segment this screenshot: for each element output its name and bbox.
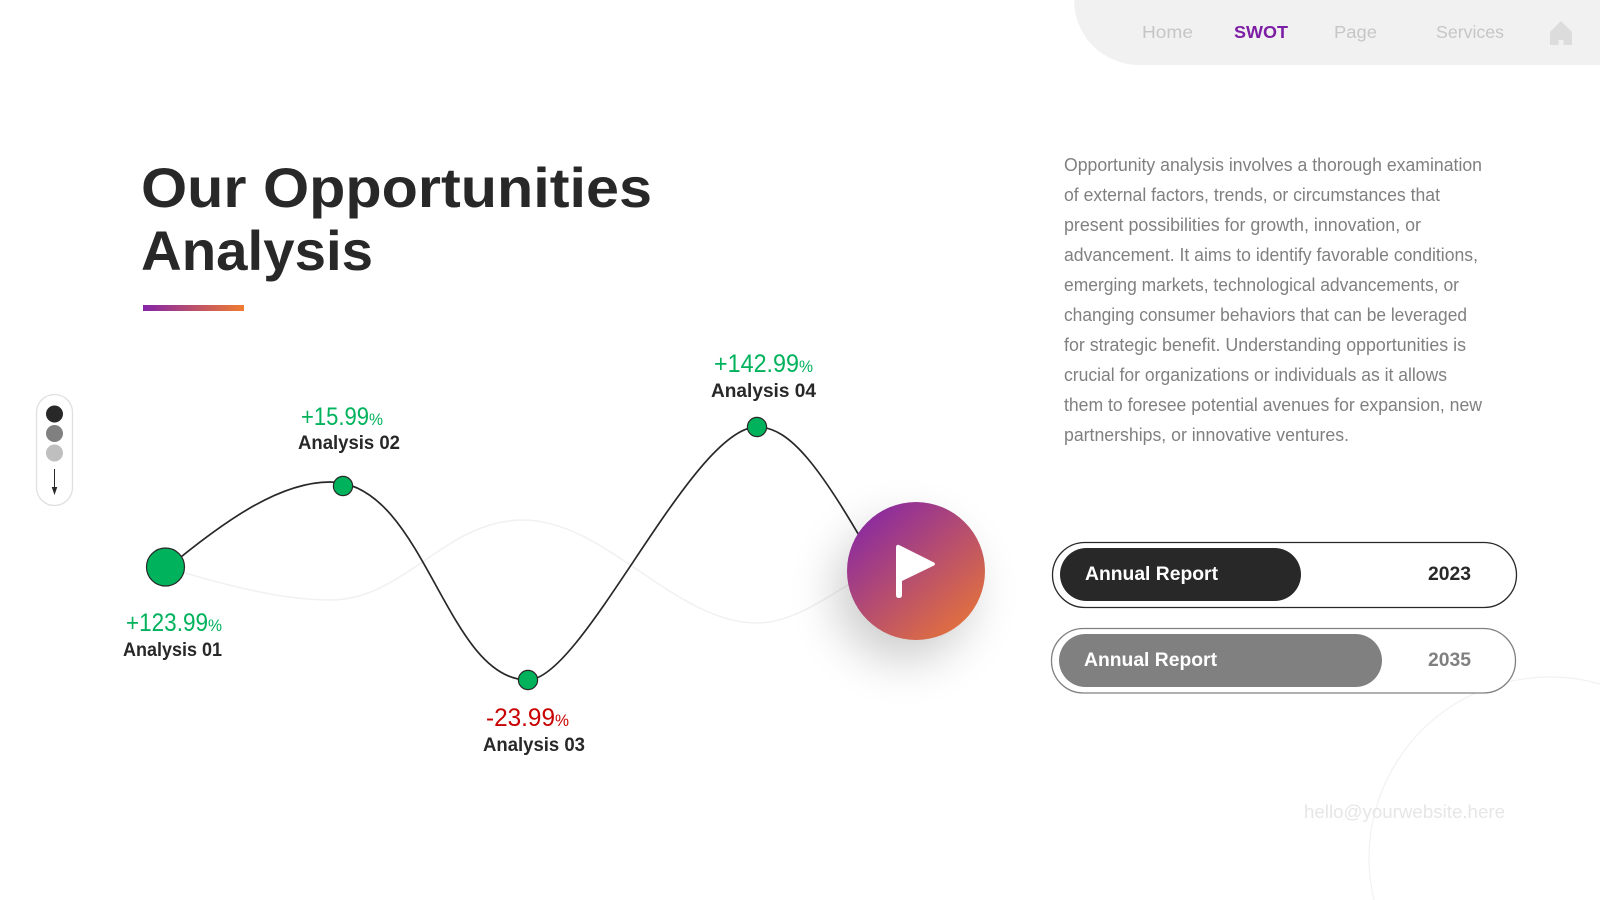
badge gradient disc [847,502,985,640]
title: Our Opportunities [141,156,652,219]
label: Analysis 03 [483,704,585,756]
report pill 2035 [1052,628,1516,693]
badge shadow [836,524,972,660]
footer email: hello@yourwebsite.here [1304,802,1505,822]
navigation bar [1074,0,1600,65]
icon: home [1550,21,1572,45]
flag badge [836,502,985,660]
title [141,156,652,282]
label: Analysis 04: % [799,357,813,376]
pager dot dark [46,406,63,422]
decorative circle outline [1369,677,1600,900]
label: Analysis 01 [123,609,222,661]
description text: for strategic benefit. Understanding opportunities is [1064,335,1466,355]
label: Analysis 04: Analysis 04 [711,381,816,402]
title gradient underline [143,305,244,311]
pill outline [1052,542,1516,608]
data point: Analysis 03 [518,670,538,690]
description text: them to foresee potential avenues for expansion, new [1064,395,1483,415]
label: Analysis 02 [298,403,400,454]
label: Analysis 02: +15.99 [301,403,369,431]
label: Analysis 03: Analysis 03 [483,735,585,756]
label: Analysis 02: Analysis 02 [298,433,400,454]
description text: crucial for organizations or individuals as it allows [1064,365,1447,385]
description text: partnerships, or innovative ventures. [1064,425,1349,445]
pill year: 2035 [1428,650,1471,671]
nav item: Home: Home [1142,22,1193,42]
description text: changing consumer behaviors that can be leveraged [1064,305,1467,325]
description text: of external factors, trends, or circumstances that [1064,185,1440,205]
pager outline [36,394,72,506]
label: Analysis 04: +142.99 [714,350,799,378]
nav item: SWOT active: SWOT [1234,22,1288,42]
description text: Opportunity analysis involves a thorough examination [1064,155,1482,175]
nav item: Services: Services [1436,22,1504,42]
nav item: Page: Page [1334,22,1377,42]
icon: flag [896,545,935,598]
pill fill bar [1060,548,1301,601]
pager dot mid [46,425,63,442]
pill label: Annual Report [1084,650,1218,671]
report pill 2023 [1052,542,1516,608]
arrow: scroll down [52,469,57,495]
data point: Analysis 01 [146,548,184,586]
line chart [146,417,880,690]
label: Analysis 01: % [208,616,222,635]
label: Analysis 01: +123.99 [126,609,208,637]
description text: emerging markets, technological advancements, or [1064,275,1459,295]
data point: Analysis 04 [747,417,767,437]
label: Analysis 02: % [369,410,383,429]
title: Analysis [141,219,373,282]
label: Analysis 03: -23.99 [486,704,555,732]
description text [1064,155,1483,445]
description text: advancement. It aims to identify favorable conditions, [1064,245,1478,265]
description text: present possibilities for growth, innovation, or [1064,215,1421,235]
pager dot light [46,444,63,462]
pill year: 2023 [1428,564,1471,585]
label: Analysis 01: Analysis 01 [123,640,222,661]
data point: Analysis 02 [333,476,353,496]
light background curve [165,520,880,623]
pill fill bar [1059,634,1382,687]
pill label: Annual Report [1085,564,1219,585]
nav background panel [1074,0,1600,65]
label: Analysis 03: % [555,711,569,730]
side pager control [36,394,72,506]
label: Analysis 04 [711,350,816,402]
main black curve [165,427,880,680]
pill outline [1052,628,1516,693]
